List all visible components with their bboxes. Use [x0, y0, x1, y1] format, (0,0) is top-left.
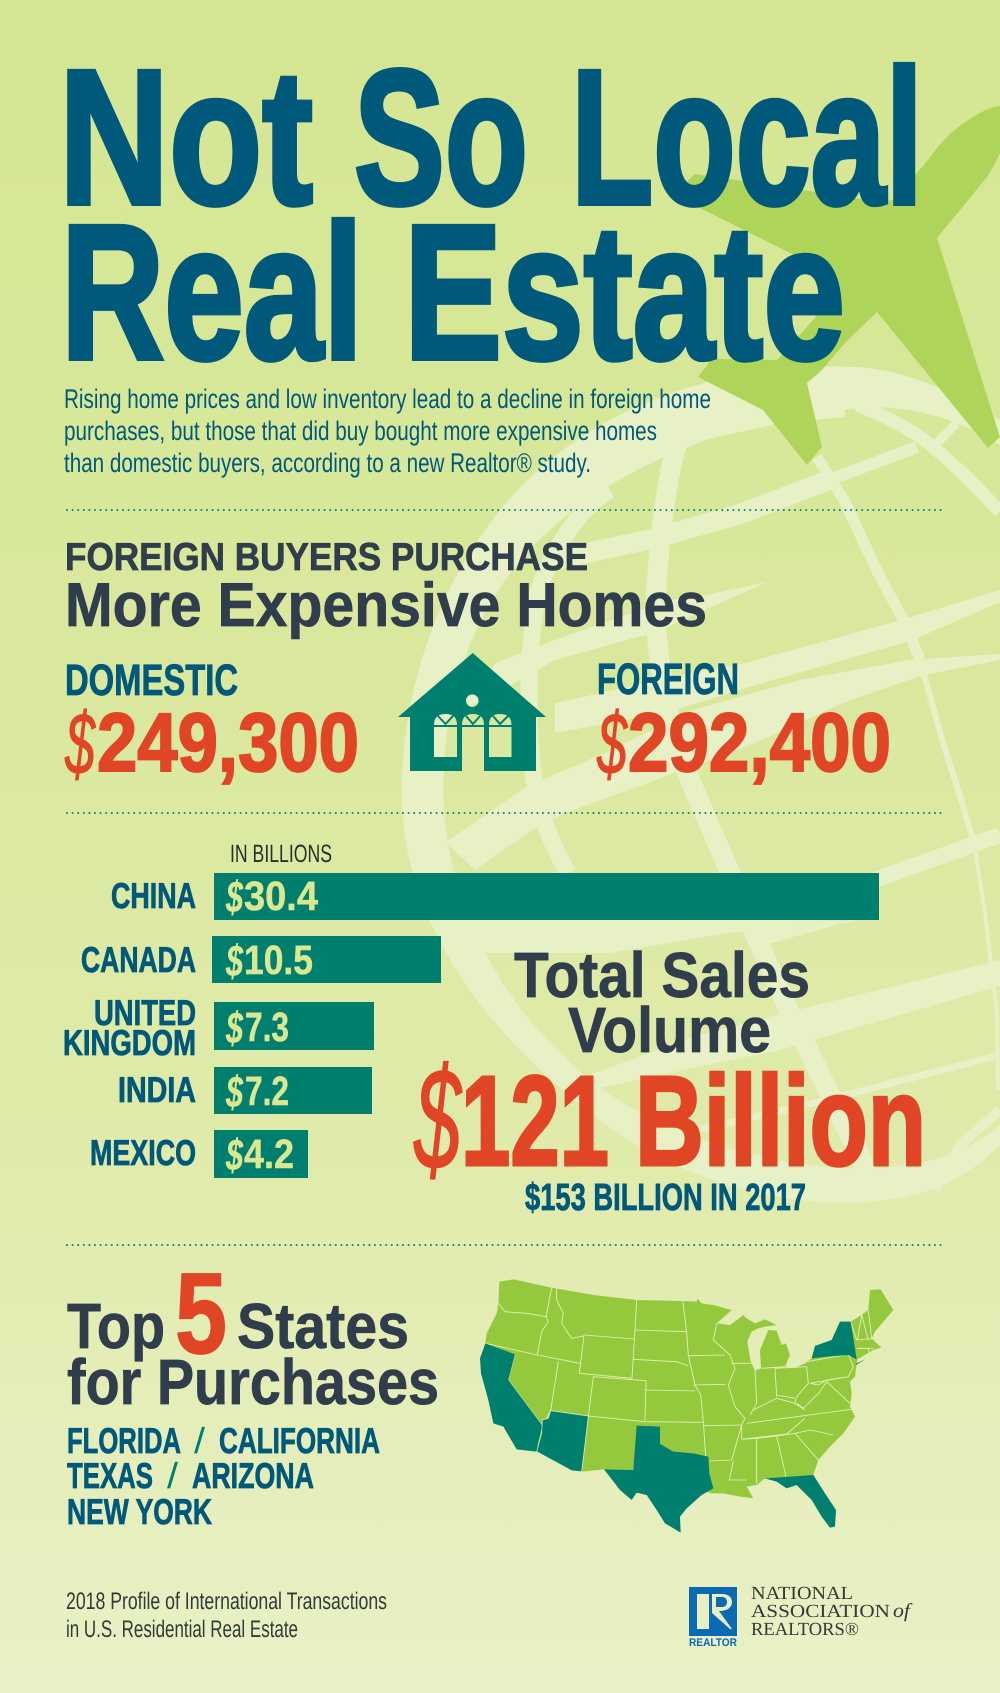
- logo: National Association of Realtors: REALTOR: [689, 1637, 737, 1649]
- bar: United Kingdom: [63, 992, 374, 1063]
- list: top states: [67, 1420, 380, 1532]
- globe graphic: [402, 367, 1000, 1203]
- domestic price: $: [64, 694, 96, 793]
- highlighted: New York: [812, 1322, 865, 1365]
- list: top states: TEXAS: [67, 1455, 153, 1496]
- heading: top 5 states: States: [237, 1290, 409, 1362]
- logo: National Association of Realtors: of: [893, 1600, 913, 1622]
- bar: China: CHINA: [111, 875, 196, 916]
- foreign price: [596, 655, 891, 793]
- bar: India: [118, 1067, 372, 1117]
- highlighted: Texas: [604, 1426, 713, 1533]
- bar: Mexico: [90, 1130, 308, 1180]
- icon: airplane: [685, 106, 1000, 465]
- title: [59, 30, 923, 400]
- icon: Realtor R block: [689, 1587, 737, 1636]
- intro paragraph: [64, 384, 711, 478]
- bar: Canada: [81, 936, 441, 986]
- highlighted: Florida: [765, 1475, 836, 1528]
- foreign price: 292,400: [628, 696, 891, 789]
- callout: total sales volume: $: [413, 1038, 462, 1200]
- callout: total sales volume: Volume: [568, 994, 771, 1066]
- logo: National Association of Realtors: ASSOCIATION: [751, 1602, 890, 1622]
- bar: Mexico: MEXICO: [90, 1132, 196, 1173]
- domestic price: [64, 656, 359, 793]
- callout: total sales volume: [413, 939, 926, 1219]
- heading: top 5 states: for Purchases: [67, 1346, 439, 1418]
- title: Not: [59, 30, 313, 244]
- domestic price: DOMESTIC: [65, 656, 238, 705]
- bar: India: $: [225, 1068, 243, 1117]
- list: top states: /: [167, 1455, 178, 1496]
- icon: house: [398, 653, 546, 771]
- state borders: [485, 1288, 877, 1483]
- heading: top 5 states: [67, 1250, 439, 1418]
- bar: Canada: 10.5: [244, 937, 313, 983]
- intro paragraph: Rising home prices and low inventory lead to a decline in foreign home: [64, 384, 711, 414]
- domestic price: 249,300: [97, 696, 359, 789]
- list: top states: FLORIDA: [67, 1420, 181, 1461]
- bar: United Kingdom: 7.3: [245, 1004, 289, 1050]
- bar: Mexico: 4.2: [244, 1131, 294, 1177]
- bar: China: $: [225, 873, 243, 922]
- heading: top 5 states: Top: [67, 1290, 165, 1362]
- bar: China: 30.4: [244, 873, 318, 919]
- source note: in U.S. Residential Real Estate: [66, 1616, 298, 1643]
- bar chart: sales by country: [63, 840, 879, 1180]
- bar: United Kingdom: $: [225, 1004, 243, 1053]
- logo: National Association of Realtors: NATIONAL: [751, 1584, 853, 1604]
- bar: United Kingdom: UNITED: [94, 992, 196, 1033]
- map: United States: [480, 1279, 893, 1533]
- foreign price: $: [596, 694, 628, 793]
- title: Real: [61, 184, 363, 400]
- axis note: IN BILLIONS: [230, 840, 332, 868]
- foreign price: FOREIGN: [597, 655, 739, 704]
- bar: Canada: $: [225, 937, 243, 986]
- title: Estate: [404, 184, 845, 400]
- heading: foreign buyers: More Expensive Homes: [65, 571, 707, 640]
- title: So: [354, 30, 528, 244]
- callout: total sales volume: 121: [461, 1050, 609, 1193]
- list: top states: /: [194, 1420, 205, 1461]
- intro paragraph: than domestic buyers, according to a new Realtor® study.: [64, 448, 591, 478]
- bar: India: 7.2: [245, 1068, 289, 1114]
- list: top states: ARIZONA: [192, 1455, 314, 1496]
- bar: India: INDIA: [118, 1069, 196, 1110]
- source note: [66, 1588, 387, 1643]
- bar: Mexico: $: [225, 1131, 243, 1180]
- heading: foreign buyers: [65, 536, 707, 640]
- list: top states: NEW YORK: [67, 1491, 212, 1532]
- list: top states: CALIFORNIA: [219, 1420, 380, 1461]
- logo: National Association of Realtors: [689, 1584, 913, 1649]
- source note: 2018 Profile of International Transactions: [66, 1588, 387, 1615]
- heading: foreign buyers: FOREIGN BUYERS PURCHASE: [65, 536, 588, 579]
- lower 48 base: [485, 1279, 893, 1498]
- callout: total sales volume: Total Sales: [514, 939, 810, 1011]
- bar: China: [111, 873, 879, 922]
- heading: top 5 states: 5: [175, 1250, 227, 1378]
- bar: Canada: CANADA: [81, 939, 196, 980]
- highlighted: Arizona: [537, 1411, 588, 1472]
- bar: United Kingdom: KINGDOM: [63, 1022, 196, 1063]
- highlighted: California: [480, 1343, 542, 1452]
- logo: National Association of Realtors: REALTORS®: [751, 1620, 859, 1640]
- callout: total sales volume: $153 BILLION IN 2017: [525, 1177, 806, 1219]
- intro paragraph: purchases, but those that did buy bought more expensive homes: [64, 416, 657, 446]
